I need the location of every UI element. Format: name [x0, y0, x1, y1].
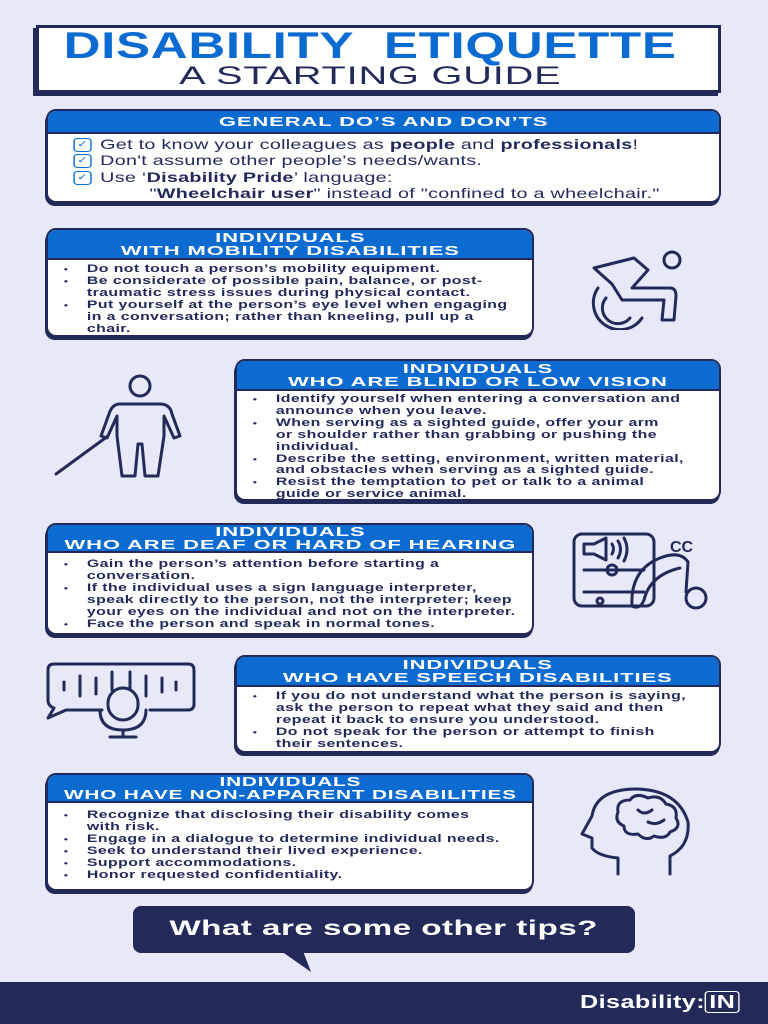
heading: WITH MOBILITY DISABILITIES [120, 244, 460, 258]
panel: blind or low vision [235, 359, 721, 501]
heading [48, 230, 532, 260]
list: Identify yourself when entering a conversation and [276, 393, 680, 405]
title box [36, 25, 721, 93]
panel: mobility [46, 228, 534, 337]
list: Be considerate of possible pain, balance, or post- [87, 275, 483, 287]
panel: general do's and don'ts [46, 109, 721, 203]
list: When serving as a sighted guide, offer your arm [276, 417, 659, 429]
list: your eyes on the individual and not on the interpreter. [87, 606, 516, 618]
list: their sentences. [276, 738, 403, 750]
heading: GENERAL DO’S AND DON’TS [219, 115, 548, 129]
list: and obstacles when serving as a sighted guide. [276, 464, 654, 476]
list: guide or service animal. [276, 488, 467, 500]
list [64, 809, 500, 881]
list: repeat it back to ensure you understood. [276, 714, 599, 726]
heading: WHO ARE DEAF OR HARD OF HEARING [64, 538, 516, 552]
checklist: "Wheelchair user" instead of "confined to a wheelchair." [150, 185, 660, 201]
heading: INDIVIDUALS [215, 231, 365, 245]
checklist: Use ‘Disability Pride’ language: [100, 169, 393, 185]
heading [48, 111, 719, 134]
list: speak directly to the person, not the interpreter; keep [87, 594, 512, 606]
heading: WHO ARE BLIND OR LOW VISION [288, 374, 668, 388]
icon: person with cane [54, 374, 182, 478]
list: Engage in a dialogue to determine individual needs. [87, 833, 500, 845]
list: or shoulder rather than grabbing or pushing the [276, 429, 657, 441]
list: Resist the temptation to pet or talk to a animal [276, 476, 644, 488]
checklist [73, 136, 660, 201]
heading: WHO HAVE NON-APPARENT DISABILITIES [64, 788, 516, 802]
list [253, 393, 684, 500]
callout: other tips: What are some other tips? [170, 917, 598, 940]
title: DISABILITY ETIQUETTE [64, 25, 677, 66]
list [64, 263, 508, 335]
list: in a conversation; rather than kneeling, pull up a [87, 311, 474, 323]
list: individual. [276, 441, 359, 453]
icon: hearing aid and captions: CC [670, 539, 694, 556]
subtitle: A STARTING GUIDE [179, 62, 562, 90]
footer [0, 982, 768, 1024]
list: with risk. [87, 821, 160, 833]
heading: INDIVIDUALS [403, 362, 553, 376]
panel: speech disabilities [235, 655, 721, 753]
heading [48, 775, 532, 803]
list: announce when you leave. [276, 405, 487, 417]
list: Do not touch a person’s mobility equipment. [87, 263, 440, 275]
heading [237, 361, 719, 391]
panel: deaf or hard of hearing [46, 523, 534, 635]
list: Do not speak for the person or attempt to finish [276, 726, 655, 738]
panel: non-apparent disabilities [46, 773, 534, 891]
list: ask the person to repeat what they said and then [276, 702, 664, 714]
checklist: Get to know your colleagues as people and professionals! [100, 136, 638, 152]
icon: wheelchair [592, 250, 682, 330]
callout: other tips [133, 906, 635, 972]
list: conversation. [87, 570, 195, 582]
logo: Disability:IN [580, 992, 735, 1012]
list: traumatic stress issues during physical contact. [87, 287, 470, 299]
list: Recognize that disclosing their disability comes [87, 809, 469, 821]
list: If you do not understand what the person is saying, [276, 690, 686, 702]
list: If the individual uses a sign language interpreter, [87, 582, 477, 594]
list: Describe the setting, environment, written material, [276, 453, 684, 465]
list [253, 690, 686, 750]
list: Face the person and speak in normal tones. [87, 618, 435, 630]
heading: INDIVIDUALS [215, 525, 365, 539]
list: Support accommodations. [87, 857, 297, 869]
heading [237, 657, 719, 687]
icon: hearing aid and captions [572, 532, 708, 610]
list: chair. [87, 323, 131, 335]
heading: INDIVIDUALS [403, 658, 553, 672]
heading: WHO HAVE SPEECH DISABILITIES [283, 670, 673, 684]
heading [48, 525, 532, 553]
icon: head with brain [580, 788, 690, 876]
checklist: Don't assume other people's needs/wants. [100, 152, 482, 168]
list: Gain the person’s attention before starting a [87, 558, 439, 570]
list: Put yourself at the person’s eye level when engaging [87, 299, 508, 311]
list: Honor requested confidentiality. [87, 869, 342, 881]
heading: INDIVIDUALS [219, 775, 361, 789]
icon: speech bubble with microphone [46, 662, 196, 738]
list: Seek to understand their lived experience. [87, 845, 423, 857]
list [64, 558, 516, 630]
